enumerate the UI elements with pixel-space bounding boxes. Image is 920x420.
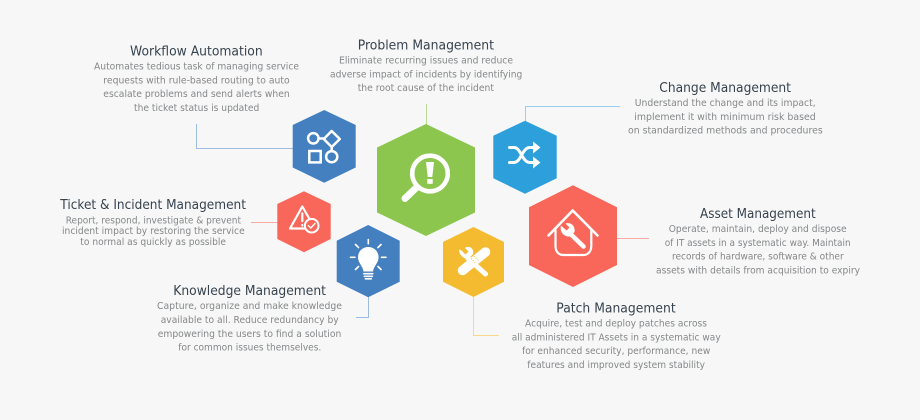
icon: shuffle arrows <box>510 142 540 168</box>
description: asset management: assets with details from acquisition to expiry <box>656 266 860 277</box>
description: ticket and incident management <box>62 215 245 248</box>
text block: problem management <box>330 37 522 94</box>
heading: knowledge management: Knowledge Management <box>173 283 326 299</box>
text block: knowledge management <box>157 283 342 354</box>
description: problem management: adverse impact of incidents by identifying <box>330 69 522 80</box>
description: workflow automation: escalate problems and send alerts when <box>103 89 290 100</box>
heading: patch management: Patch Management <box>556 300 676 316</box>
icon: warning triangle with check <box>290 206 319 232</box>
description: ticket and incident management: to normal as quickly as possible <box>80 237 226 248</box>
text block: ticket and incident management <box>59 197 246 248</box>
description: change management: Understand the change and its impact, <box>635 98 816 109</box>
description: knowledge management: available to all. Reduce redundancy by <box>161 315 339 326</box>
description: asset management: of IT assets in a systematic way. Maintain <box>665 238 851 249</box>
text block: patch management <box>512 300 721 371</box>
heading: ticket and incident management: Ticket & Incident Management <box>59 197 246 213</box>
hexagon node: workflow automation <box>293 110 356 183</box>
connector: problem management <box>426 104 428 125</box>
connector: asset management <box>617 238 649 240</box>
hexagon node: knowledge management <box>337 225 400 297</box>
icon: magnifier with exclamation mark <box>405 156 448 198</box>
description: change management: on standardized methods and procedures <box>628 126 823 137</box>
heading: change management: Change Management <box>659 80 791 96</box>
icon: house with wrench <box>548 210 598 255</box>
description: knowledge management: Capture, organize and make knowledge <box>157 301 342 312</box>
description: workflow automation: Automates tedious task of managing service <box>94 62 299 72</box>
text block: change management <box>628 80 823 137</box>
connector: patch management <box>474 297 499 336</box>
description: problem management <box>330 55 522 94</box>
connector: workflow automation <box>196 124 293 148</box>
hexagon node: asset management <box>529 185 617 287</box>
description: change management: implement it with minimum risk based <box>634 112 816 123</box>
description: knowledge management: empowering the users to find a solution <box>158 329 341 340</box>
description: knowledge management: for common issues themselves. <box>178 343 321 354</box>
hexagon node: change management <box>493 121 557 194</box>
hexagon node: patch management <box>443 227 504 297</box>
description: patch management: all administered IT Assets in a systematic way <box>512 332 721 343</box>
description: patch management: Acquire, test and deploy patches across <box>525 318 707 329</box>
connector: ticket and incident management <box>251 222 278 224</box>
connector: change management <box>526 106 620 121</box>
description: problem management: the root cause of the incident <box>358 83 494 94</box>
icon: light bulb <box>350 240 386 279</box>
heading: workflow automation: Workflow Automation <box>130 44 263 60</box>
description: ticket and incident management: Report, respond, investigate & prevent <box>66 215 241 226</box>
description: ticket and incident management: incident impact by restoring the service <box>62 226 245 237</box>
description: change management <box>628 98 823 137</box>
icon: wrench and bandage <box>459 247 486 274</box>
description: problem management: Eliminate recurring issues and reduce <box>339 55 513 66</box>
description: workflow automation: requests with rule-based routing to auto <box>103 75 290 86</box>
description: patch management <box>512 318 721 371</box>
description: workflow automation <box>94 62 299 114</box>
text block: workflow automation <box>94 44 299 114</box>
description: asset management: records of hardware, software & other <box>672 252 844 263</box>
text block: asset management <box>656 206 860 277</box>
description: asset management: Operate, maintain, deploy and dispose <box>669 224 847 235</box>
heading: problem management: Problem Management <box>358 37 494 53</box>
hexagon node: ticket and incident management <box>277 191 331 252</box>
connector: knowledge management <box>356 297 368 318</box>
description: patch management: for enhanced security, performance, new <box>522 346 710 357</box>
heading: asset management: Asset Management <box>700 206 816 222</box>
icon: workflow diagram <box>308 131 340 162</box>
description: patch management: features and improved system stability <box>527 360 705 371</box>
description: asset management <box>656 224 860 277</box>
description: workflow automation: the ticket status is updated <box>134 103 259 114</box>
description: knowledge management <box>157 301 342 354</box>
hexagon node: problem management <box>377 124 475 236</box>
